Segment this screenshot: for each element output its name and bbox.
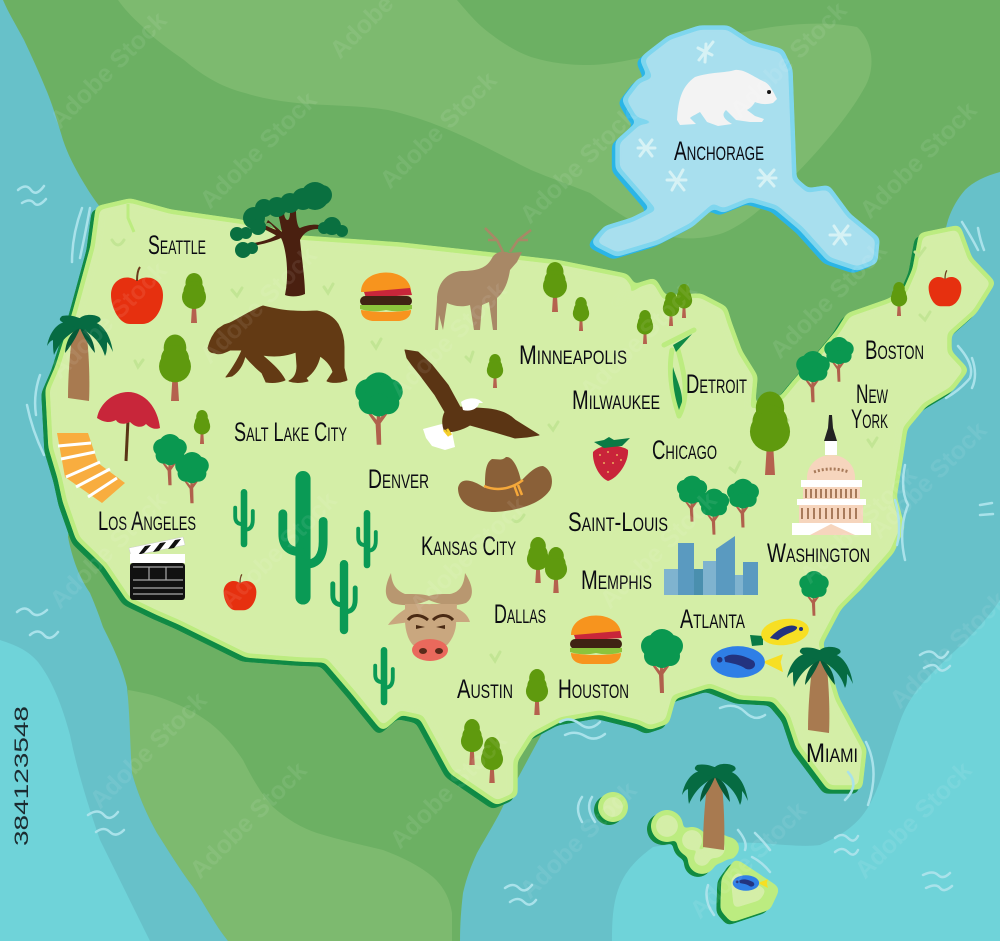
capitol base xyxy=(792,523,871,535)
longhorn bull head xyxy=(386,573,472,661)
label: Salt Lake City: Salt Lake City xyxy=(234,417,347,447)
prey in talons xyxy=(423,423,455,450)
label: Washington: Washington xyxy=(767,538,870,568)
Lake Michigan xyxy=(664,330,694,416)
round tree xyxy=(355,372,403,445)
round tree xyxy=(641,629,683,693)
small land marks xyxy=(112,240,930,661)
movie clapperboard xyxy=(129,537,185,600)
beach towel xyxy=(57,433,125,503)
label: Denver: Denver xyxy=(368,464,429,494)
lighter water bottom right xyxy=(612,600,1000,941)
Alaska inner fill xyxy=(597,30,875,266)
mainland bright border xyxy=(50,203,990,800)
round tree xyxy=(727,479,759,527)
label: Memphis: Memphis xyxy=(581,565,652,595)
strawberry xyxy=(593,437,630,481)
label: Saint-Louis: Saint-Louis xyxy=(568,507,668,537)
label: York: York xyxy=(851,404,888,434)
watermark pattern: Adobe Stock xyxy=(849,756,977,884)
cacti xyxy=(235,479,393,702)
label: Minneapolis: Minneapolis xyxy=(519,340,627,370)
watermark pattern: Adobe Stock xyxy=(44,256,172,384)
fish: Hawaii xyxy=(733,875,768,891)
watermark pattern: Adobe Stock xyxy=(574,276,702,404)
city skyline xyxy=(664,536,758,595)
label: Miami: Miami xyxy=(806,738,858,768)
olive tree xyxy=(487,354,503,388)
lighter green band north xyxy=(118,0,872,238)
acacia trunk xyxy=(258,208,322,296)
apple: northwest xyxy=(111,267,163,324)
label: Detroit: Detroit xyxy=(686,369,747,399)
round tree xyxy=(677,476,707,522)
stock image id: 384123548 xyxy=(12,706,33,846)
US Capitol building xyxy=(792,415,871,535)
label: Boston: Boston xyxy=(865,335,924,365)
olive tree xyxy=(750,392,790,475)
lighter water bottom left xyxy=(0,640,150,941)
watermark pattern: Adobe Stock xyxy=(794,461,922,589)
olive tree xyxy=(543,262,567,312)
Hawaii inner land xyxy=(603,797,766,908)
bull face xyxy=(405,604,457,645)
palm tree: Florida xyxy=(787,647,853,733)
round tree xyxy=(175,452,209,503)
cactus: near Denver xyxy=(358,513,376,565)
bull muzzle xyxy=(412,639,448,661)
watermark pattern: Adobe Stock xyxy=(854,96,982,224)
round tree xyxy=(796,351,830,402)
burger: Houston xyxy=(570,616,622,664)
label: Austin: Austin xyxy=(457,674,513,704)
olive tree xyxy=(159,334,191,401)
bull horns xyxy=(386,573,472,605)
round tree xyxy=(824,337,854,382)
olive tree xyxy=(663,292,679,326)
grizzly bear xyxy=(208,306,347,383)
label: Kansas City: Kansas City xyxy=(421,531,516,561)
acacia tree xyxy=(230,182,348,296)
Alaska xyxy=(593,30,875,269)
label: Atlanta: Atlanta xyxy=(680,604,745,634)
capitol dome xyxy=(807,455,855,480)
watermark pattern: Adobe Stock xyxy=(374,66,502,194)
cactus: near Los Angeles xyxy=(235,492,253,544)
watermark pattern: Adobe Stock xyxy=(214,486,342,614)
watermark pattern: Adobe Stock xyxy=(684,796,812,924)
label: Chicago: Chicago xyxy=(652,435,717,465)
beach umbrella xyxy=(97,392,160,461)
olive tree xyxy=(545,547,567,593)
label: Anchorage: Anchorage xyxy=(674,136,764,166)
polar bear eye xyxy=(767,90,771,94)
watermark pattern: Adobe Stock xyxy=(514,776,642,904)
eagle body and wings xyxy=(405,350,539,438)
label: New: New xyxy=(856,379,888,409)
apple: southwest xyxy=(224,574,256,610)
watermark pattern: Adobe Stock xyxy=(194,241,322,369)
Hawaii islands xyxy=(594,792,773,919)
olive tree xyxy=(461,719,483,765)
watermark pattern: Adobe Stock xyxy=(404,491,532,619)
watermark pattern: Adobe Stock xyxy=(184,756,312,884)
Hawaii shadows xyxy=(594,795,769,919)
round trees xyxy=(153,337,854,693)
watermark pattern: Adobe Stock xyxy=(724,0,852,124)
palm tree: Hawaii xyxy=(682,764,748,850)
round tree xyxy=(799,571,829,616)
lighter green patch south xyxy=(128,690,452,941)
fish: yellow xyxy=(750,616,811,648)
olive tree xyxy=(676,284,692,318)
watermark pattern: Adobe Stock xyxy=(384,276,512,404)
burger: north xyxy=(360,272,412,321)
polar bear xyxy=(677,70,777,126)
eagle head xyxy=(461,398,483,411)
olive tree xyxy=(527,537,549,583)
bald eagle xyxy=(405,350,539,450)
round tree xyxy=(153,434,187,485)
olive tree xyxy=(637,310,653,344)
cactus: south xyxy=(333,564,355,630)
sea waves xyxy=(17,186,993,915)
round tree xyxy=(699,489,729,535)
Hawaii land xyxy=(598,792,773,916)
watermark pattern: Adobe Stock xyxy=(84,686,212,814)
left ocean xyxy=(0,0,228,941)
label: Los Angeles: Los Angeles xyxy=(98,506,196,536)
Alaska outer edge xyxy=(597,30,875,266)
fish: blue xyxy=(711,646,783,678)
eagle talons xyxy=(444,429,451,436)
palm tree: California xyxy=(47,315,113,401)
olive tree xyxy=(481,737,503,783)
right ocean xyxy=(460,172,1000,941)
watermark pattern: Adobe Stock xyxy=(44,6,172,134)
snowflakes on Alaska xyxy=(638,42,850,244)
Alaska shadow xyxy=(593,33,871,269)
label: Milwaukee: Milwaukee xyxy=(572,385,660,415)
bull ears xyxy=(388,608,470,625)
olive tree xyxy=(891,282,907,316)
olive tree xyxy=(573,297,589,331)
olive tree xyxy=(526,669,548,715)
label: Seattle: Seattle xyxy=(148,230,206,260)
cactus: near Texas border xyxy=(375,650,393,702)
watermark pattern: Adobe Stock xyxy=(594,486,722,614)
Puget Sound notch xyxy=(128,204,134,232)
cowboy hat xyxy=(458,457,552,512)
watermark pattern: Adobe Stock xyxy=(864,416,992,544)
label: Houston: Houston xyxy=(558,674,629,704)
capitol finial xyxy=(824,415,837,441)
olive tree xyxy=(182,273,206,323)
olive tree xyxy=(194,410,210,444)
deer xyxy=(435,228,531,330)
acacia foliage xyxy=(230,182,348,258)
watermark pattern: Adobe Stock xyxy=(384,726,512,854)
watermark pattern: Adobe Stock xyxy=(514,101,642,229)
watermark pattern: Adobe Stock xyxy=(764,236,892,364)
watermark pattern: Adobe Stock xyxy=(44,486,172,614)
watermark pattern: Adobe Stock xyxy=(194,86,322,214)
mainland fill xyxy=(50,203,990,800)
cactus: large xyxy=(283,479,323,597)
city labels xyxy=(98,230,924,768)
label: Dallas: Dallas xyxy=(494,599,546,629)
bull brows xyxy=(408,615,453,620)
olive trees xyxy=(159,262,907,783)
apple: Maine xyxy=(929,270,961,306)
mainland USA xyxy=(46,203,990,804)
mainland shadow xyxy=(46,207,986,804)
